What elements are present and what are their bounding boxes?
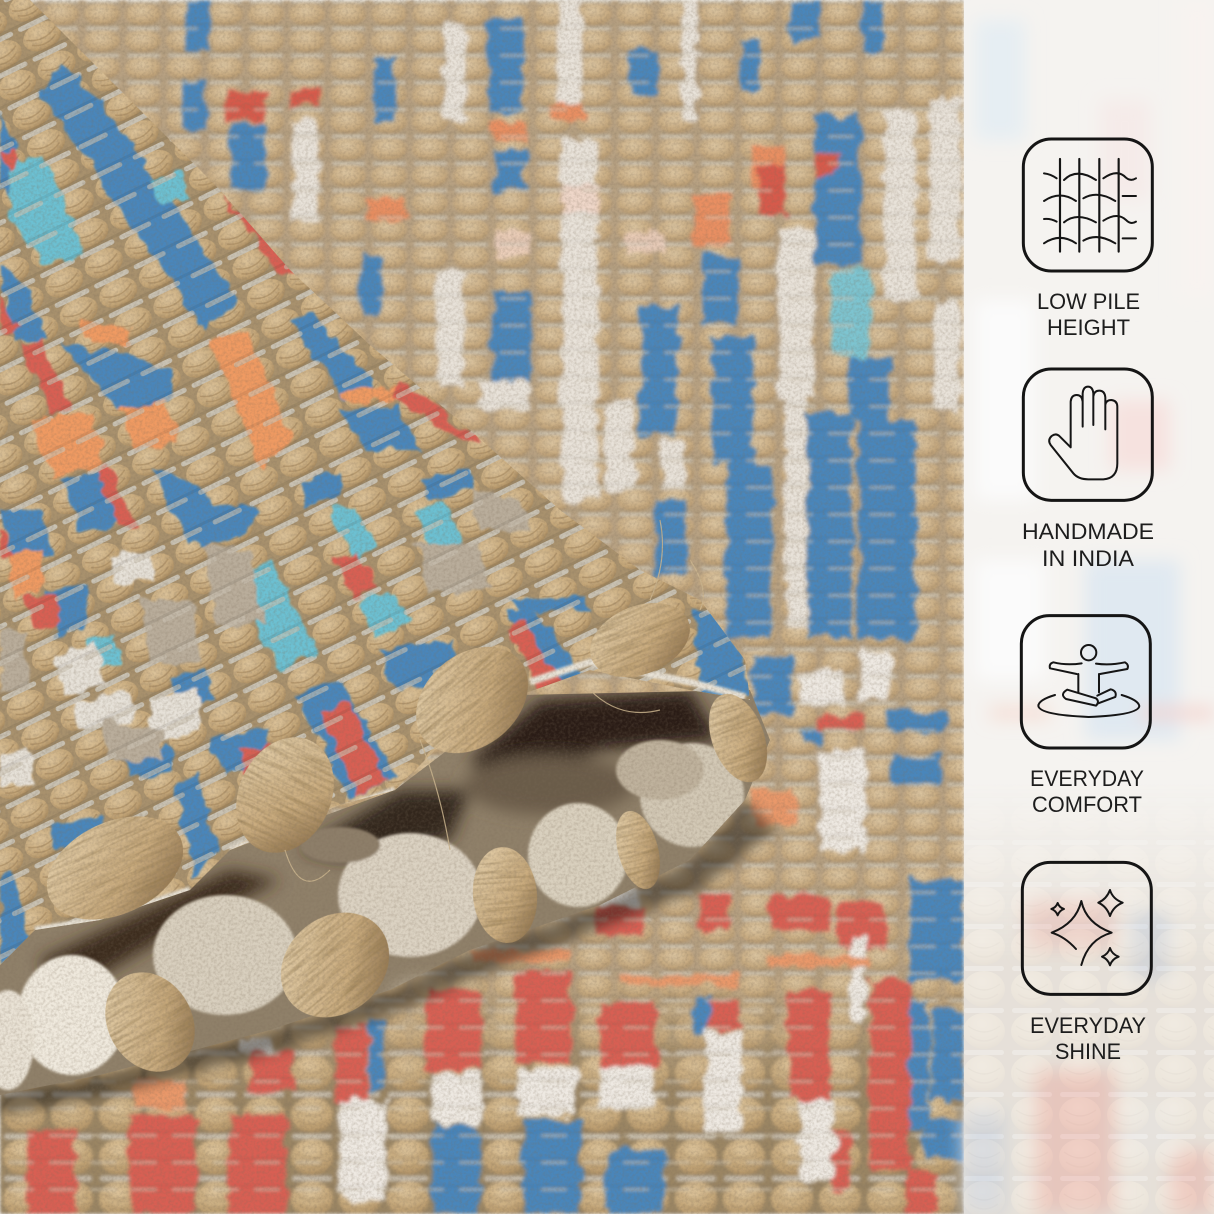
label: LOW PILE [1037,289,1140,314]
label: HANDMADE [1022,519,1154,544]
fine woven grain [0,0,964,1214]
underside of the rolled rug [0,680,800,1110]
lit fringe of the fold [35,662,745,930]
icon: woven pile grid [1023,139,1152,271]
feature: everyday comfort [1021,616,1150,817]
flat rug, softly out of focus [0,0,964,1214]
panel: translucent features sidebar [964,0,1214,1214]
feature: everyday shine: SHINE [1055,1039,1121,1064]
fold colour blocks [0,65,750,965]
feature: low pile height: HEIGHT [1047,315,1130,340]
feature: everyday comfort: COMFORT [1032,792,1142,817]
jute knots on the underside [105,810,660,1072]
jute knots along the fold edge [46,602,768,920]
warp bands across the flat weave [0,0,964,1214]
label: EVERYDAY [1030,1013,1146,1038]
flat rug colour blocks, lower right area [25,650,964,1214]
shadow beneath the roll [0,800,775,1115]
fold warp bands [0,0,750,960]
cream cotton loops [0,740,744,1090]
feature: handmade in india: IN INDIA [1042,546,1134,571]
icon: seated figure on mat [1021,616,1150,748]
flat rug colour stripes, upper area [182,0,960,640]
feature: everyday shine [1022,862,1151,1064]
icon: sparkles [1022,862,1151,994]
photo: woven rug with rolled corner [0,0,964,1214]
icon: open hand [1023,369,1152,500]
stray jute fibres [285,520,703,881]
faded rug continuation behind the panel [964,0,1214,1214]
feature: low pile height [1023,139,1152,340]
shaded interior [40,690,720,1020]
feature: handmade in india [1022,369,1154,571]
rolled corner top face [0,0,800,1000]
faint jute knots behind the panel [964,844,1214,1214]
label: EVERYDAY [1030,766,1144,791]
